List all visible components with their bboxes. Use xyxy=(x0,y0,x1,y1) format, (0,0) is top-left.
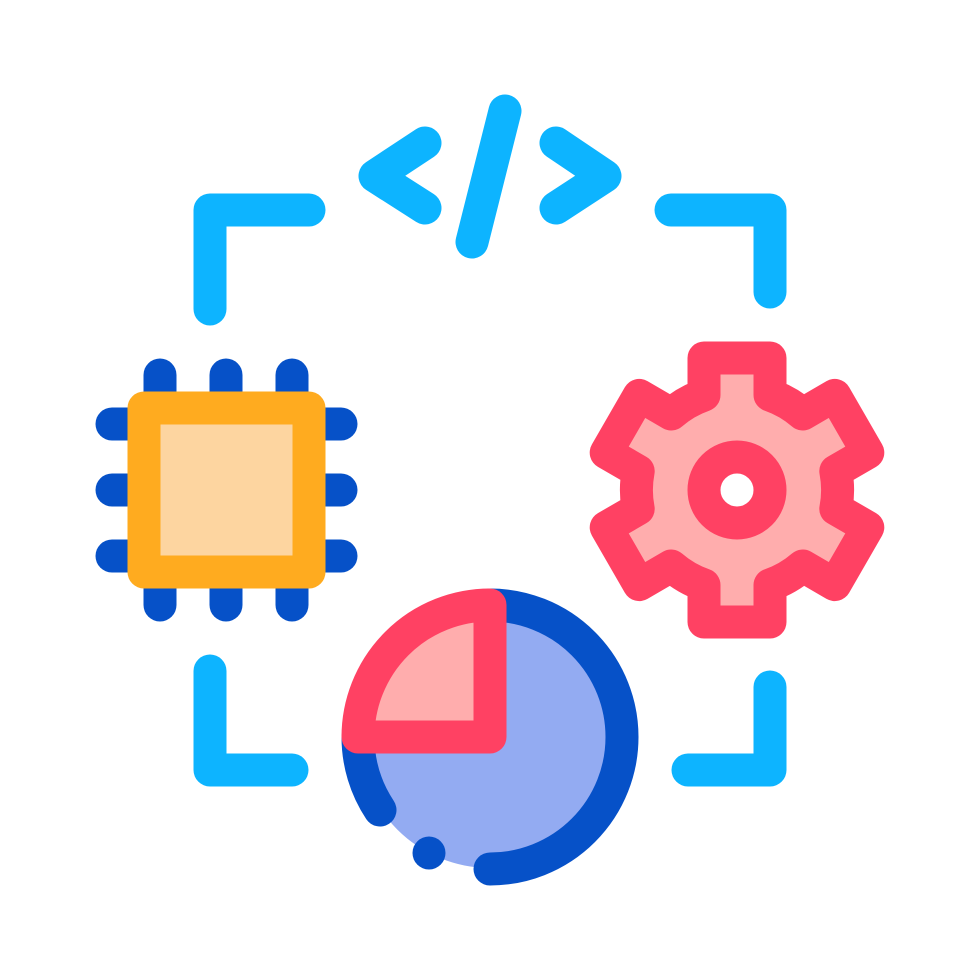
chip body xyxy=(144,408,309,572)
corner bracket: bottom right xyxy=(688,687,770,770)
icon: gear xyxy=(606,358,868,622)
icon: code brackets xyxy=(375,111,605,242)
pie outline: lower left arc xyxy=(358,737,380,810)
corner bracket: top left xyxy=(210,210,309,309)
pie outline: main arc xyxy=(490,605,622,869)
gear hub xyxy=(704,457,770,523)
pie base xyxy=(359,606,621,868)
corner bracket: bottom left xyxy=(210,671,292,770)
icon: microchip xyxy=(112,375,341,605)
pie slice xyxy=(358,605,490,737)
pie outline: dot xyxy=(412,836,446,870)
icon: pie chart xyxy=(358,605,622,870)
chip pins xyxy=(112,375,341,605)
corner bracket: top right xyxy=(671,210,770,292)
gear body xyxy=(606,358,868,622)
